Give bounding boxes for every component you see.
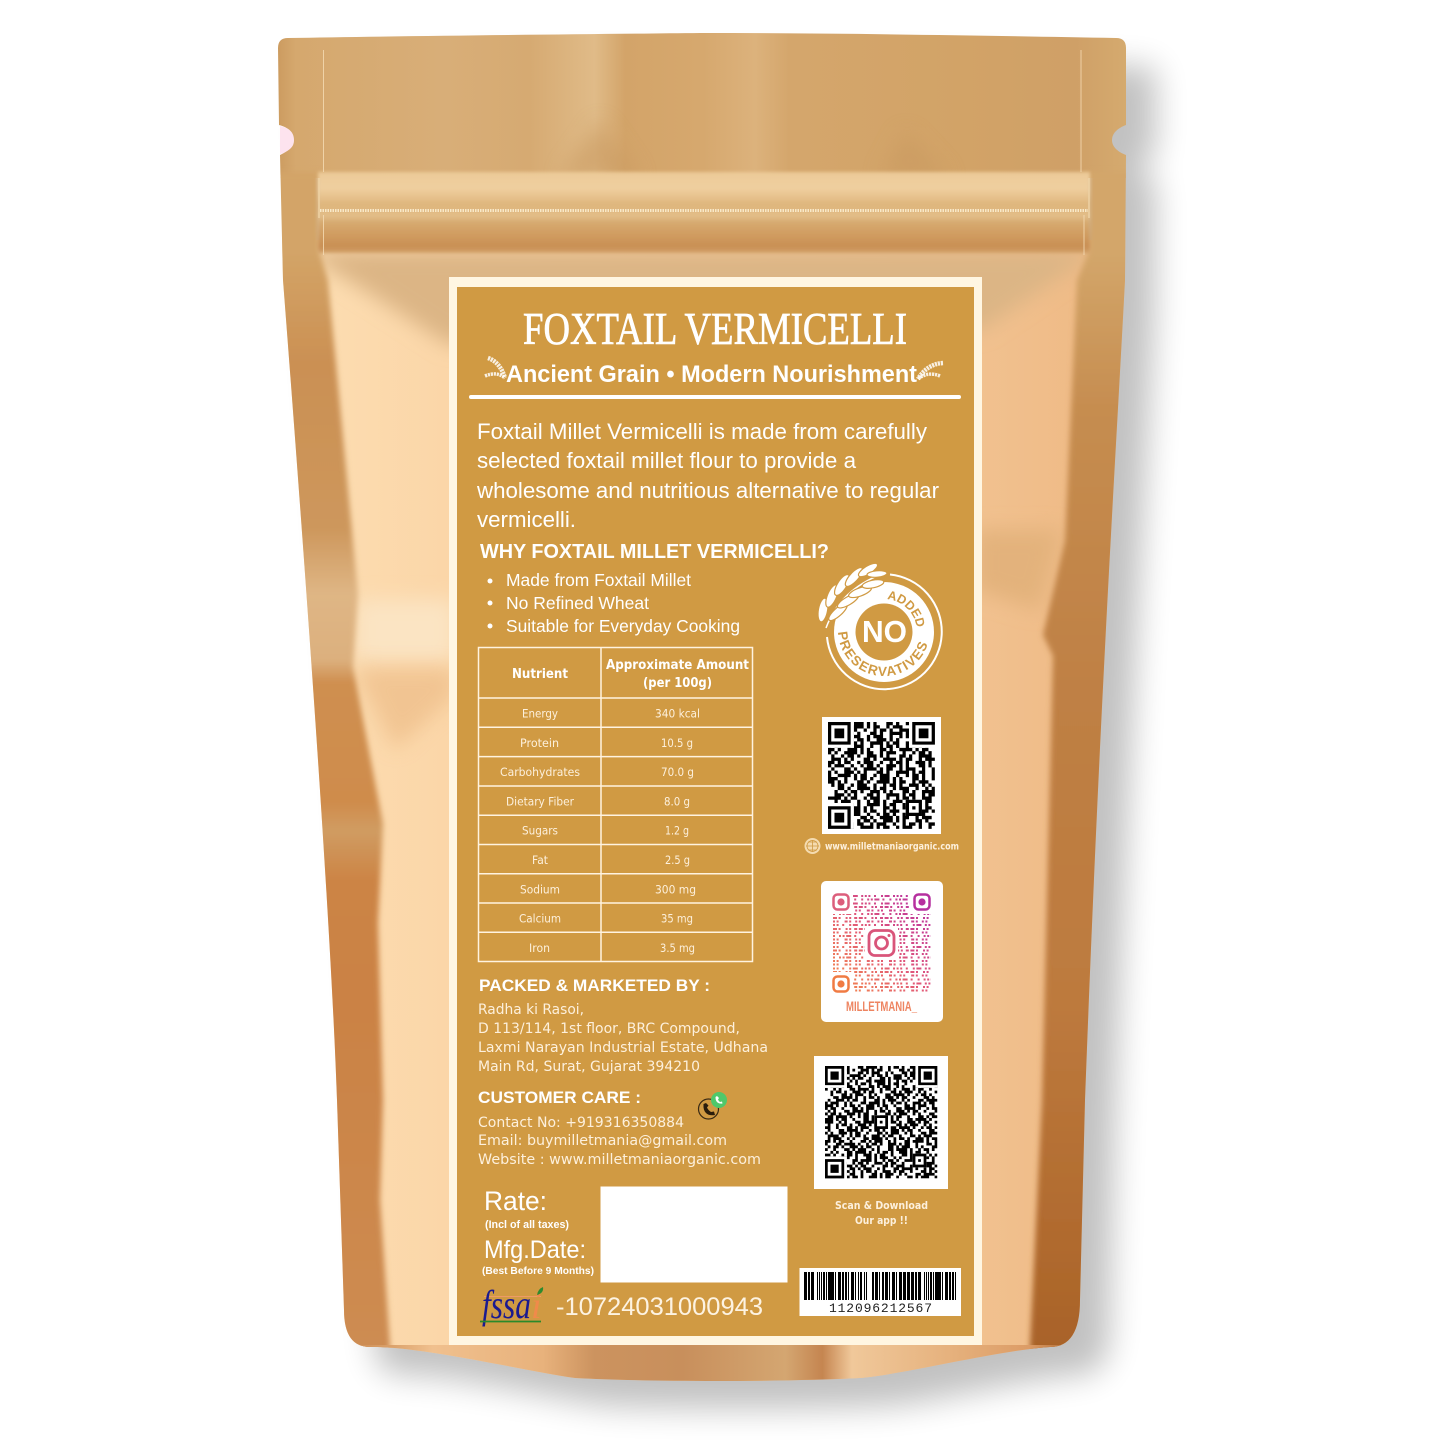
title: FOXTAIL VERMICELLI xyxy=(523,304,907,354)
benefits list: Suitable for Everyday Cooking xyxy=(506,616,740,636)
instagram qr code xyxy=(821,881,943,1022)
app download caption: Our app !! xyxy=(855,1215,908,1227)
pouch body xyxy=(260,28,1150,1400)
tagline: Ancient Grain • Modern Nourishment xyxy=(506,361,917,388)
nutrition table: 70.0 g xyxy=(661,765,694,779)
nutrition table: Dietary Fiber xyxy=(506,794,574,808)
website label: www.milletmaniaorganic.com xyxy=(825,842,959,852)
rate and mfg labels: Rate: xyxy=(484,1186,547,1216)
nutrition table: 2.5 g xyxy=(665,853,690,867)
app download qr code xyxy=(814,1056,948,1189)
rate and mfg labels: (Incl of all taxes) xyxy=(485,1219,569,1231)
nutrition table: 35 mg xyxy=(661,912,693,926)
intro paragraph xyxy=(476,419,939,532)
icon: phone xyxy=(698,1092,727,1119)
packed and marketed by: Main Rd, Surat, Gujarat 394210 xyxy=(478,1059,700,1075)
nutrition table: 8.0 g xyxy=(664,794,690,808)
website label xyxy=(804,838,959,854)
fssai logo: i xyxy=(531,1285,542,1327)
nutrition table: Fat xyxy=(532,853,548,867)
pouch shadow xyxy=(308,61,1156,1409)
fssai logo: fssa xyxy=(482,1282,531,1327)
intro paragraph: wholesome and nutritious alternative to regular xyxy=(476,478,939,503)
nutrition table: Energy xyxy=(522,706,558,720)
product pouch infographic xyxy=(278,33,1172,1426)
heading: why foxtail: WHY FOXTAIL MILLET VERMICELLI? xyxy=(480,541,829,563)
website qr code xyxy=(822,717,941,834)
customer care: Email: buymilletmania@gmail.com xyxy=(478,1133,727,1149)
rate and mfg labels xyxy=(482,1186,594,1277)
badge: no added preservatives: PRESERVATIVES xyxy=(838,632,927,676)
nutrition table: 10.5 g xyxy=(661,736,693,750)
badge: no added preservatives: ADDED xyxy=(887,591,924,626)
nutrition table: (per 100g) xyxy=(643,675,712,691)
nutrition table: 1.2 g xyxy=(665,824,689,838)
nutrition table: 300 mg xyxy=(655,882,696,896)
icon: instagram xyxy=(869,930,894,956)
app download caption xyxy=(835,1200,928,1227)
customer care: CUSTOMER CARE : xyxy=(478,1088,641,1107)
instagram qr code: MILLETMANIA_ xyxy=(846,999,917,1014)
packed and marketed by xyxy=(478,976,768,1075)
nutrition table: 340 kcal xyxy=(655,706,700,720)
icon: wheat sprig xyxy=(816,561,887,628)
intro paragraph: Foxtail Millet Vermicelli is made from carefully xyxy=(477,419,928,444)
intro paragraph: vermicelli. xyxy=(477,507,576,532)
rate and mfg labels: Mfg.Date: xyxy=(484,1236,586,1264)
blank rate box xyxy=(600,1186,788,1282)
benefits list: No Refined Wheat xyxy=(506,593,649,613)
nutrition table: Protein xyxy=(520,736,559,750)
icon: wheat right xyxy=(918,363,943,379)
nutrition table: Nutrient xyxy=(512,666,568,682)
customer care: Contact No: +919316350884 xyxy=(478,1115,684,1131)
fssai licence number: -10724031000943 xyxy=(556,1293,763,1321)
icon: wheat left xyxy=(485,358,505,378)
nutrition table: Sodium xyxy=(520,882,560,896)
rate and mfg labels: (Best Before 9 Months) xyxy=(482,1265,594,1277)
benefits list: Made from Foxtail Millet xyxy=(506,570,691,590)
intro paragraph: selected foxtail millet flour to provide a xyxy=(477,448,856,473)
nutrition table xyxy=(478,648,752,962)
barcode: 112096212567 xyxy=(829,1301,932,1316)
nutrition table: Calcium xyxy=(519,912,561,926)
nutrition table: 3.5 mg xyxy=(660,941,695,955)
customer care xyxy=(478,1088,761,1168)
barcode xyxy=(800,1268,961,1316)
packed and marketed by: D 113/114, 1st floor, BRC Compound, xyxy=(478,1021,740,1037)
customer care: Website : www.milletmaniaorganic.com xyxy=(478,1152,761,1168)
nutrition table: Carbohydrates xyxy=(500,765,580,779)
nutrition table: Sugars xyxy=(522,824,558,838)
packed and marketed by: Laxmi Narayan Industrial Estate, Udhana xyxy=(478,1040,768,1056)
icon: qr finder marks xyxy=(834,894,930,992)
nutrition table: Approximate Amount xyxy=(606,657,749,673)
panel: label card xyxy=(449,277,982,1345)
left hang-hole notch xyxy=(280,126,294,154)
packed and marketed by: Radha ki Rasoi, xyxy=(478,1002,584,1018)
badge: no added preservatives: NO xyxy=(862,614,907,649)
badge: no added preservatives xyxy=(818,564,943,690)
benefits list xyxy=(488,570,740,636)
app download caption: Scan & Download xyxy=(835,1200,928,1212)
title divider xyxy=(469,395,961,399)
nutrition table: Iron xyxy=(529,941,550,955)
packed and marketed by: PACKED & MARKETED BY : xyxy=(479,976,710,995)
